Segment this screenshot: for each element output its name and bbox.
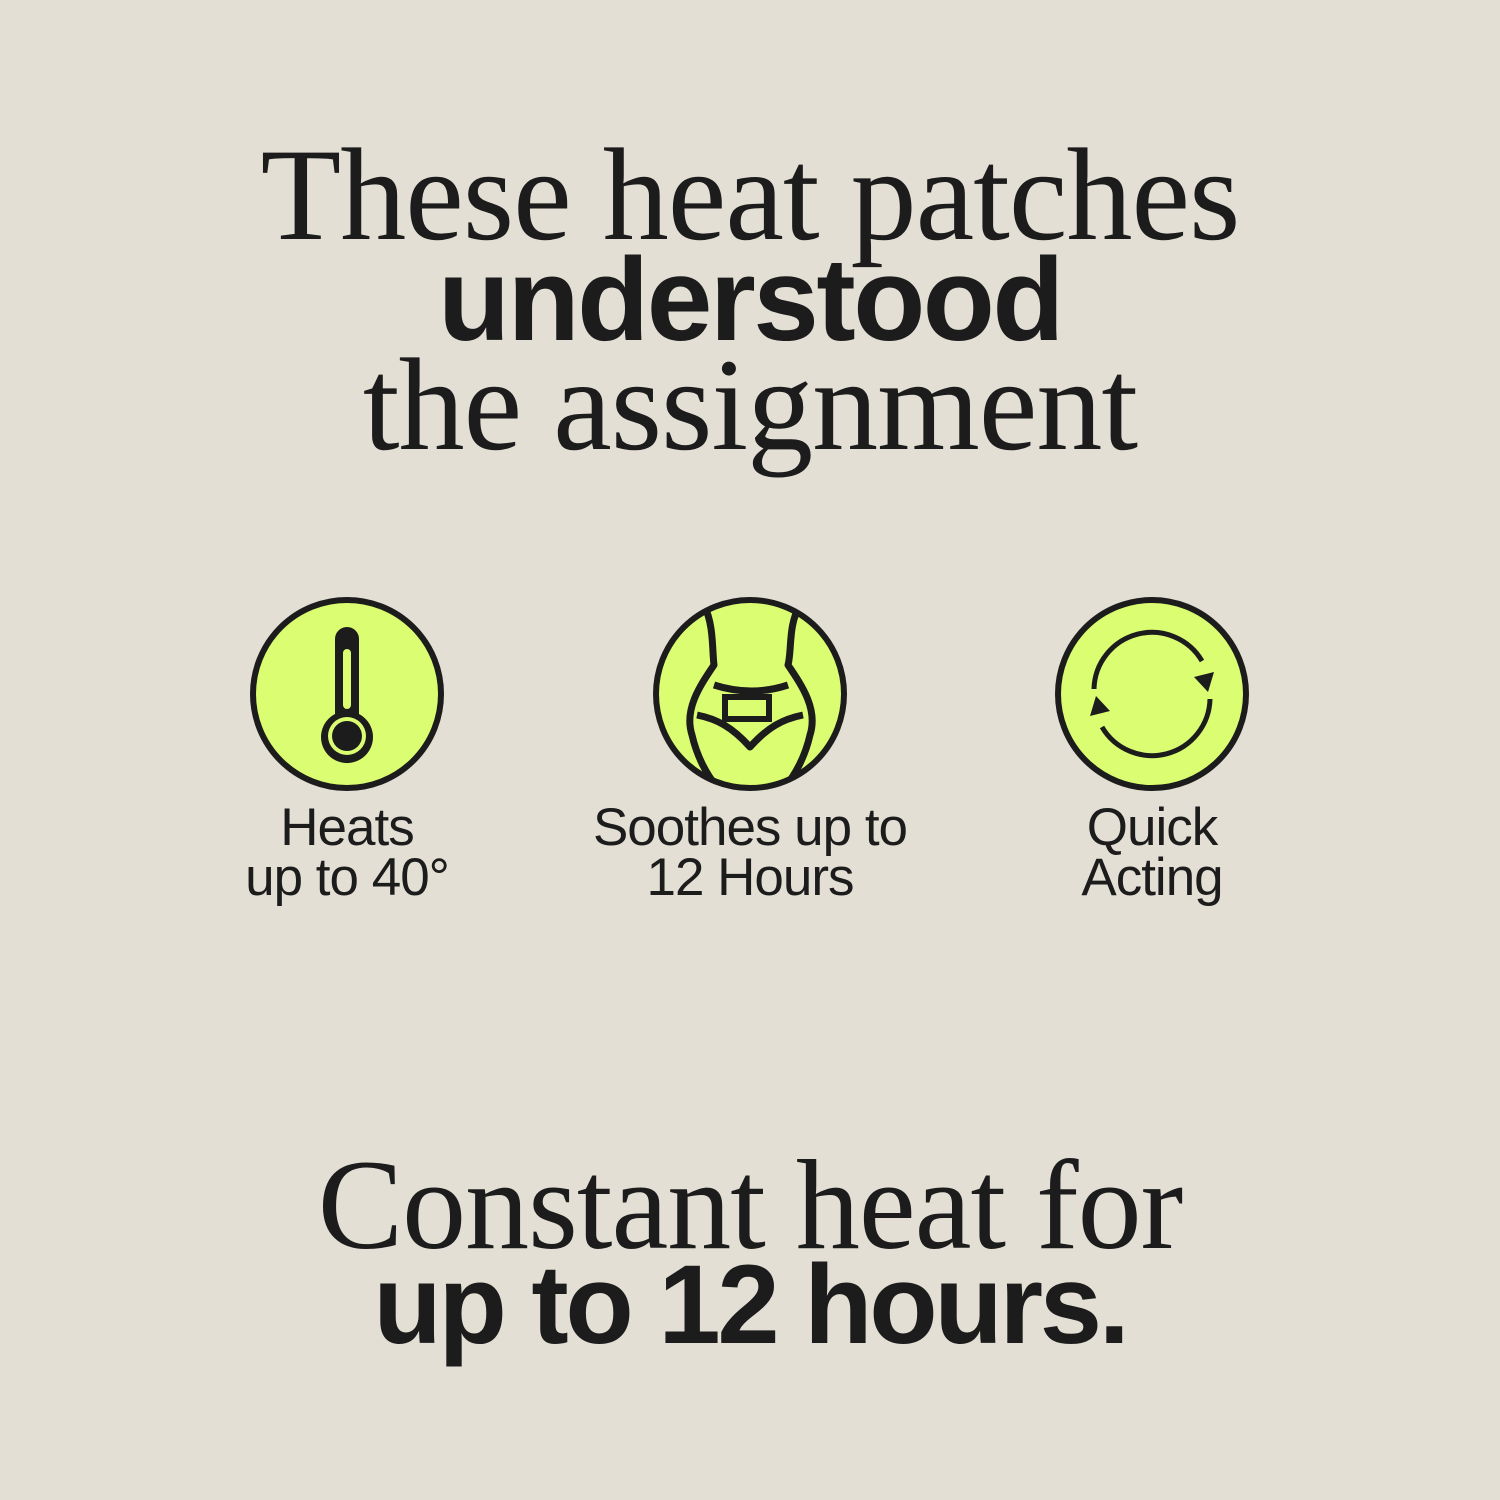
bottom headline: up to 12 hours.	[373, 1242, 1127, 1367]
title	[261, 121, 1239, 478]
label: heats: up to 40°	[245, 848, 449, 907]
title: the assignment	[363, 331, 1137, 478]
bottom headline: Constant heat for	[318, 1134, 1182, 1276]
label: quick acting: Acting	[1081, 848, 1223, 907]
label: quick acting	[1081, 798, 1223, 907]
title: understood	[438, 234, 1062, 366]
label: heats: Heats	[280, 798, 414, 857]
icon: thermometer	[250, 597, 444, 791]
bottom headline	[318, 1134, 1182, 1367]
icon: cycle arrows	[1055, 597, 1249, 791]
title: These heat patches	[261, 121, 1239, 268]
label: soothes: 12 Hours	[646, 848, 854, 907]
label: soothes	[593, 798, 907, 907]
label: heats	[245, 798, 449, 907]
icon: body with patch	[653, 597, 847, 791]
label: quick acting: Quick	[1087, 798, 1217, 857]
label: soothes: Soothes up to	[593, 798, 907, 857]
